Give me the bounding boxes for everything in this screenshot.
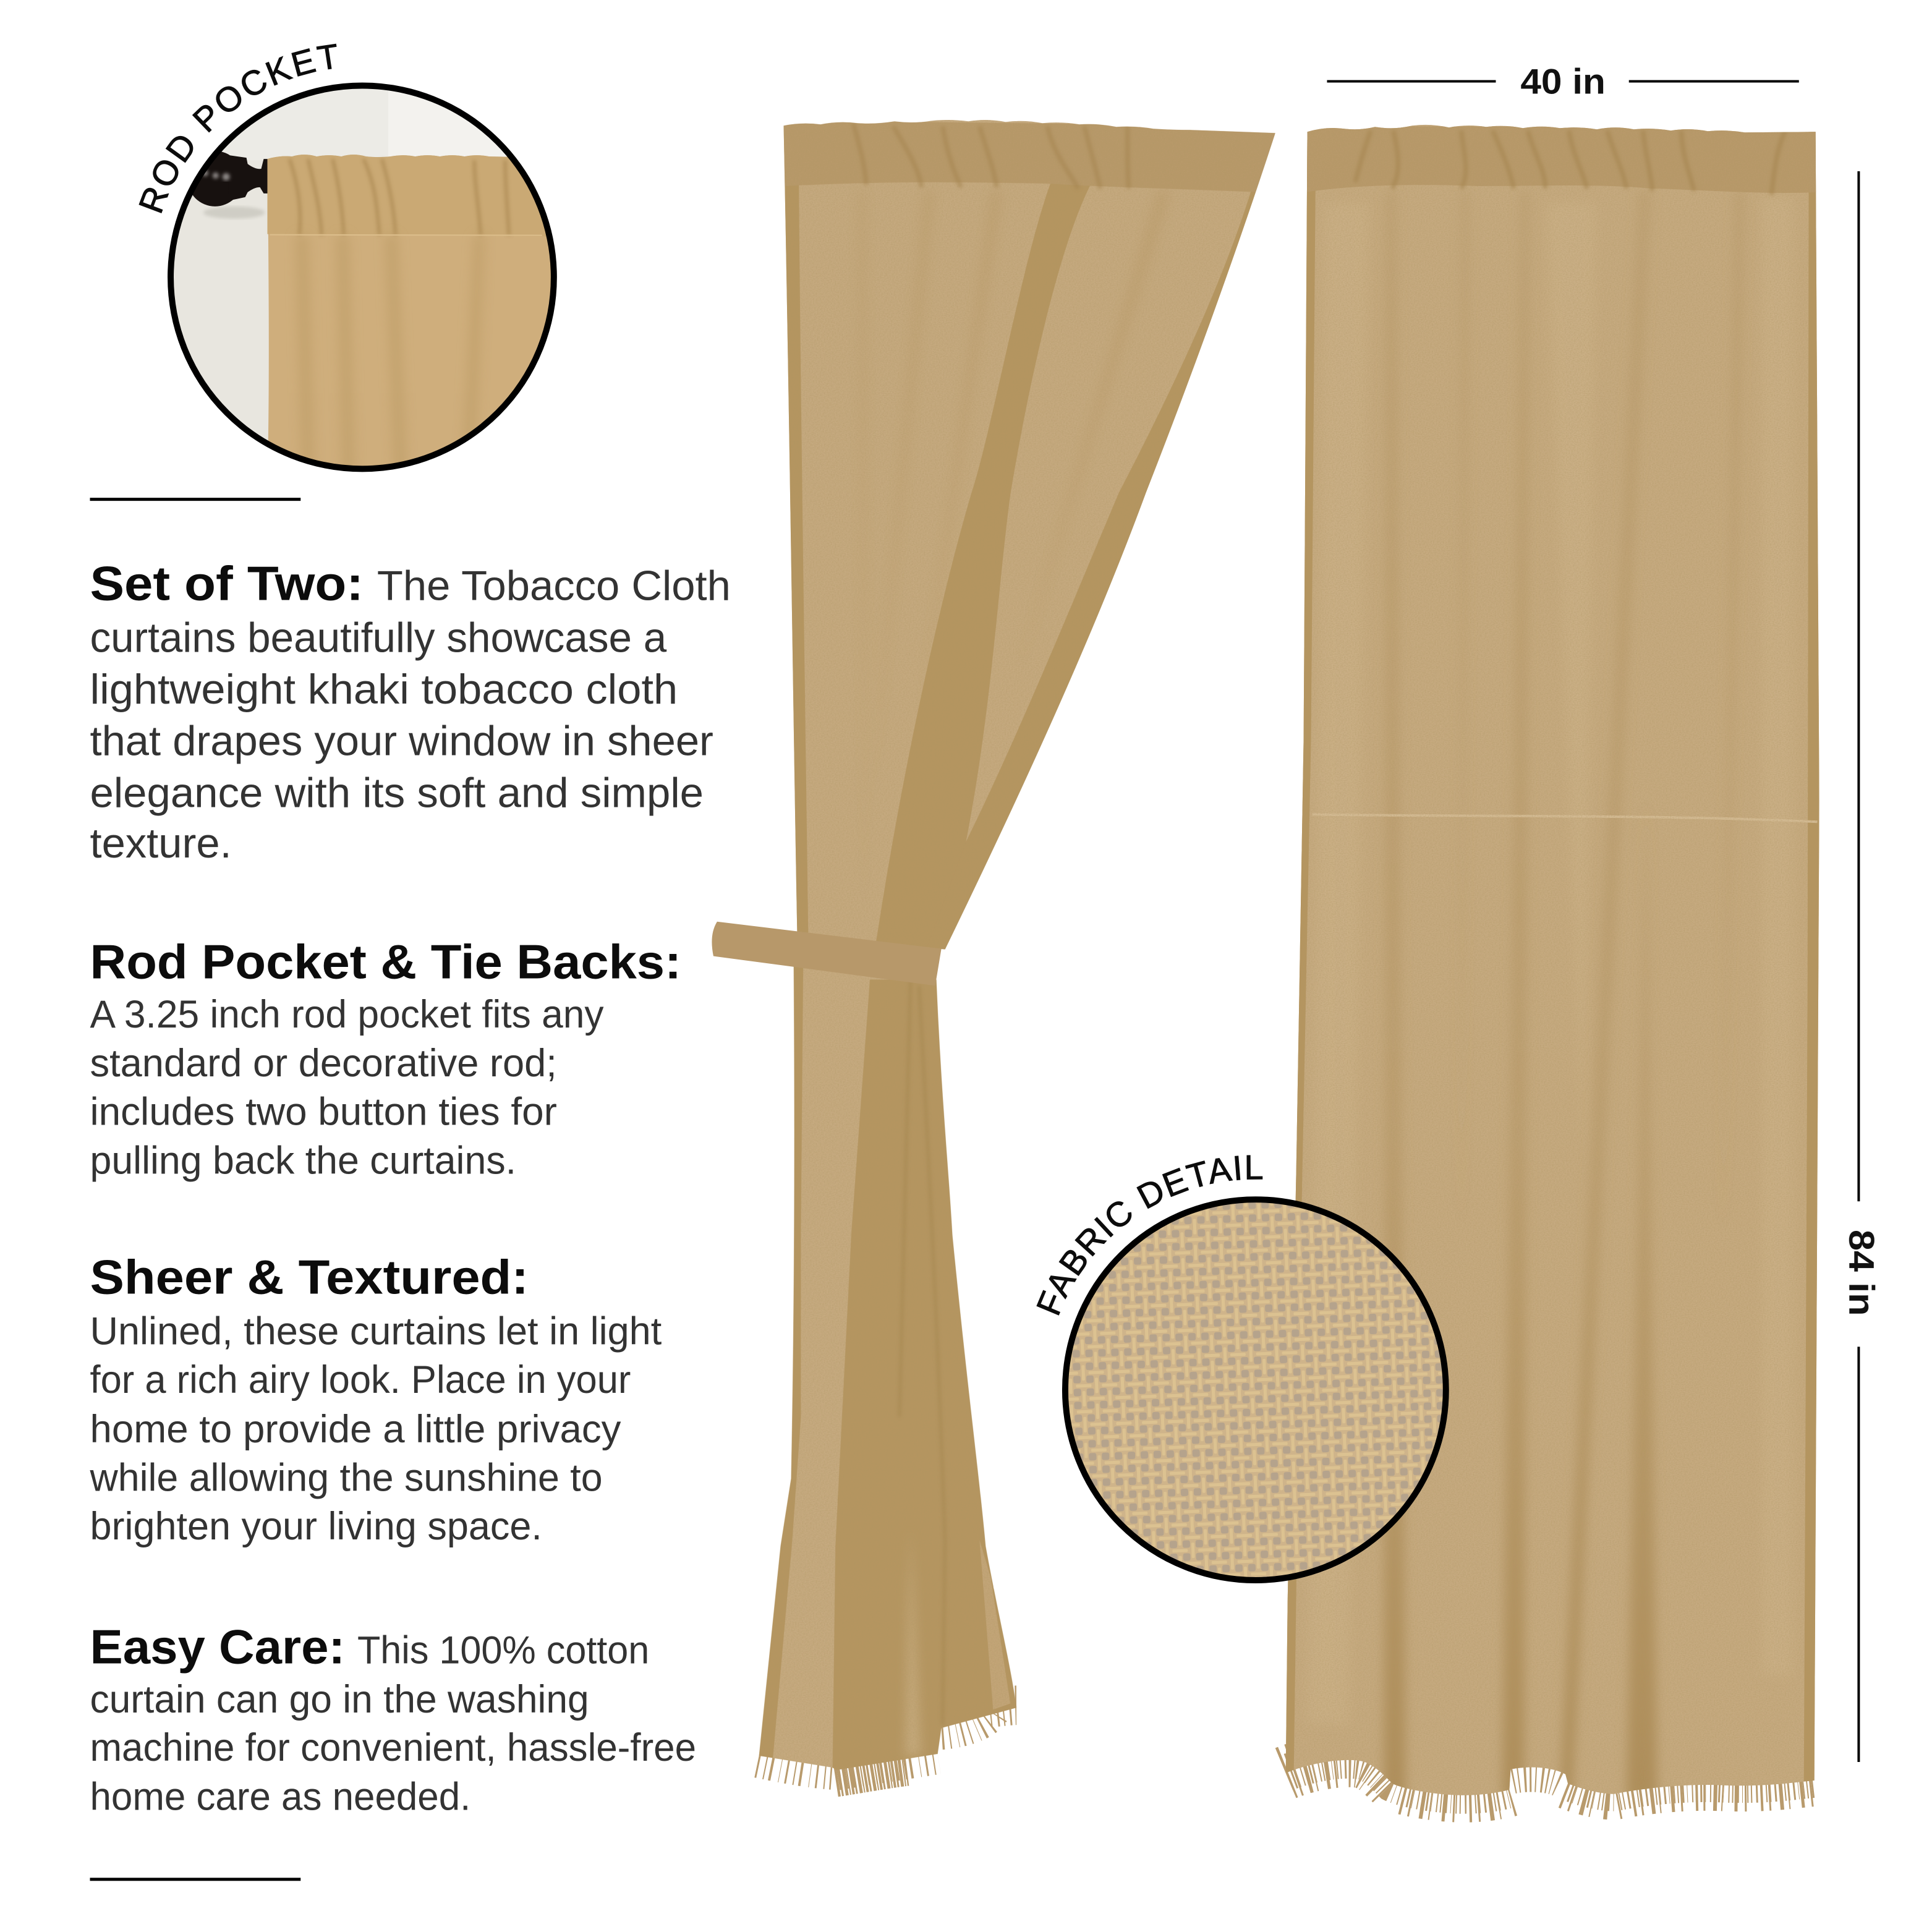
right curtain folds — [1384, 191, 1745, 1799]
right curtain side hems — [1286, 130, 1316, 1773]
text block: Sheer & Textured — [89, 1251, 662, 1548]
right curtain fringe — [1286, 1760, 1815, 1795]
text block: Easy Care — [90, 1621, 696, 1819]
lower dark pleat — [832, 979, 1035, 1787]
text block: Sheer & Textured: Sheer & Textured: — [90, 1251, 529, 1304]
front lower fringe — [759, 1754, 938, 1770]
height dimension: 84 in: 84 in — [1841, 1230, 1881, 1316]
lower curtain below tie — [752, 943, 1035, 1793]
text block: Set of Two: Set of Two: — [90, 558, 364, 611]
text block: Easy Care: home care as needed. — [90, 1776, 470, 1819]
text block: Sheer & Textured: brighten your living space. — [90, 1505, 542, 1548]
bottom rule — [90, 1878, 300, 1881]
text block: Set of Two: elegance with its soft and simple — [90, 770, 704, 816]
height dimension: 84 in — [1841, 171, 1881, 1762]
width dimension: 40 in — [1327, 62, 1799, 101]
text block: Set of Two: lightweight khaki tobacco cloth — [90, 666, 678, 713]
text block: Easy Care: This 100% cotton — [357, 1629, 649, 1672]
light streak on pleat — [906, 1528, 921, 1756]
text block: Sheer & Textured: while allowing the sunshine to — [89, 1457, 603, 1500]
lower left hem — [755, 949, 803, 1762]
text block: Sheer & Textured: for a rich airy look. Place in your — [90, 1358, 631, 1402]
text block: Set of Two: curtains beautifully showcase a — [90, 615, 667, 661]
left curtain panel — [712, 117, 1282, 1793]
window trim — [388, 80, 561, 160]
text block: Set of Two: texture. — [90, 820, 232, 867]
upper curtain above tie — [777, 117, 1282, 961]
right curtain panel — [1275, 117, 1830, 1818]
right curtain rod pocket — [1305, 126, 1821, 193]
text block: Rod Pocket & Tie Backs: includes two button ties for — [90, 1091, 557, 1134]
text block: Rod Pocket & Tie Backs: Rod Pocket & Tie Backs: — [90, 935, 681, 989]
text block: Rod Pocket & Tie Backs: A 3.25 inch rod pocket fits any — [90, 993, 604, 1036]
text block: Easy Care: curtain can go in the washing — [90, 1678, 589, 1721]
text block: Set of Two: that drapes your window in sheer — [90, 718, 713, 765]
text block: Rod Pocket & Tie Backs: pulling back the curtains. — [90, 1139, 516, 1182]
text block: Sheer & Textured: Unlined, these curtains let in light — [90, 1309, 662, 1353]
rod pocket curved label: ROD POCKET — [138, 43, 336, 213]
right diagonal hem — [924, 133, 1275, 961]
text block: Easy Care: machine for convenient, hassle-free — [90, 1726, 696, 1769]
left hem — [784, 126, 808, 937]
inset: fabric detail photo — [1036, 1155, 1449, 1583]
tie back strap — [712, 922, 942, 985]
text block: Rod Pocket & Tie Backs — [90, 935, 681, 1182]
text block: Rod Pocket & Tie Backs: standard or decorative rod; — [90, 1042, 557, 1085]
text block: Sheer & Textured: home to provide a little privacy — [90, 1408, 621, 1451]
finial shadow — [203, 206, 265, 219]
seam line — [1313, 814, 1818, 822]
rear lower layer fringes — [942, 1705, 1016, 1728]
rod pocket circle ring — [171, 86, 554, 469]
text block: Easy Care: Easy Care: — [90, 1621, 345, 1674]
rod pocket curtain — [267, 155, 561, 480]
fabric detail ring — [1065, 1199, 1446, 1580]
top rule — [90, 498, 300, 501]
diagonal dark folded band — [875, 182, 1091, 961]
rear sheer streak — [979, 1540, 1010, 1709]
left curtain rod pocket — [780, 120, 1279, 192]
text block: Set of Two: The Tobacco Cloth — [377, 563, 731, 610]
width dimension: 40 in: 40 in — [1520, 62, 1606, 101]
fabric detail curved label: FABRIC DETAIL — [1036, 1155, 1262, 1316]
inset: rod pocket photo — [138, 43, 557, 472]
text block: Set of Two — [90, 558, 731, 867]
black rod finial — [187, 151, 270, 206]
